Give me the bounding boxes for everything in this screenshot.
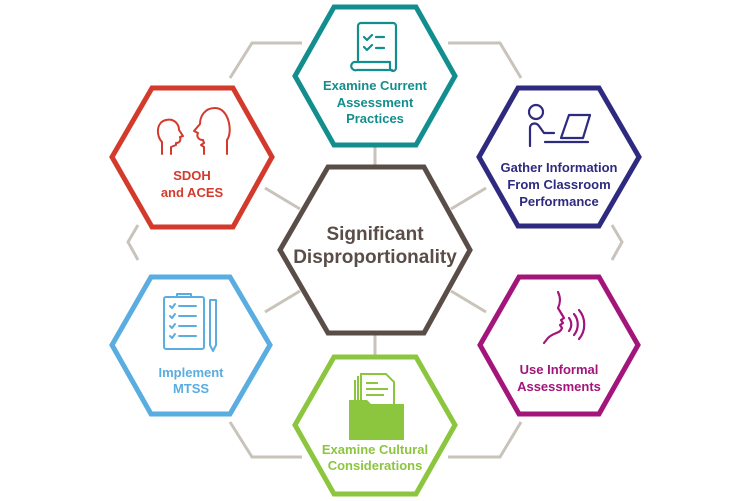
center hexagon: Significant (326, 224, 424, 245)
center hexagon: Disproportionality (293, 247, 457, 268)
panel: gather information from classroom performance: From Classroom (507, 177, 611, 192)
panel: examine cultural considerations: Examine Cultural (322, 442, 428, 457)
panel: use informal assessments: Use Informal (520, 362, 598, 377)
icon: person at laptop (529, 105, 590, 146)
panel: implement MTSS: Implement (158, 365, 224, 380)
panel: SDOH and ACES: and ACES (161, 185, 224, 200)
icon: two faces (158, 108, 230, 154)
panel: implement MTSS: MTSS (173, 381, 209, 396)
panel: gather information from classroom performance (479, 88, 639, 226)
icon: document checklist (351, 23, 396, 71)
icon: folder with files (349, 374, 404, 440)
panel: examine current assessment practices (295, 7, 455, 145)
panel: examine current assessment practices: Examine Current (323, 78, 428, 93)
panel: SDOH and ACES (112, 88, 272, 227)
panel: examine current assessment practices: Practices (346, 111, 404, 126)
panel: gather information from classroom performance: Gather Information (500, 160, 618, 175)
icon: speaking face (544, 292, 584, 343)
connectors (128, 43, 622, 457)
panel: use informal assessments (480, 277, 638, 414)
icon: clipboard and pen (164, 294, 216, 351)
panel: examine cultural considerations: Considerations (328, 458, 422, 473)
panel: examine current assessment practices: Assessment (337, 95, 414, 110)
panel: SDOH and ACES: SDOH (173, 168, 211, 183)
panel: gather information from classroom performance: Performance (519, 194, 599, 209)
panel: examine cultural considerations (295, 357, 455, 494)
panel: implement MTSS (112, 277, 270, 414)
center hexagon (280, 167, 470, 333)
panel: use informal assessments: Assessments (517, 379, 601, 394)
